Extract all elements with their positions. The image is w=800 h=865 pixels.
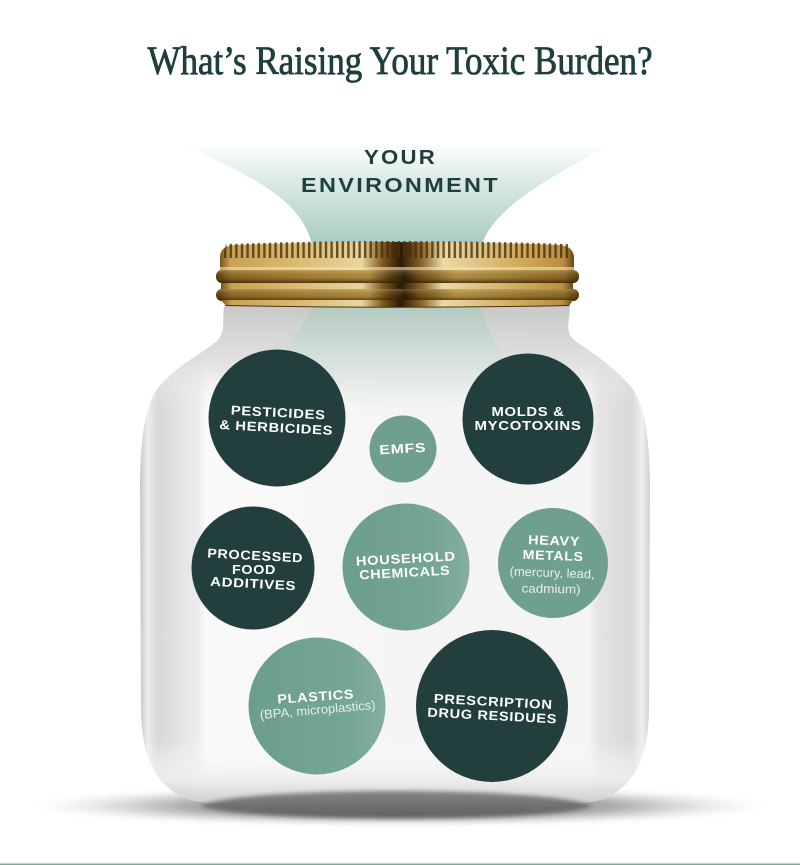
- circle: molds & mycotoxins: MOLDS &: [492, 404, 564, 419]
- funnel of environment light entering the jar: [182, 144, 612, 244]
- circle: household chemicals: [342, 504, 470, 630]
- circle: prescription drug residues: [416, 630, 568, 782]
- circle: pesticides & herbicides: & HERBICIDES: [219, 417, 334, 438]
- bottom rule: [0, 864, 800, 865]
- circle: processed food additives: ADDITIVES: [210, 574, 297, 593]
- circle: prescription drug residues: DRUG RESIDUES: [427, 705, 558, 726]
- heading: your environment: [301, 147, 500, 197]
- circle: plastics: (BPA, microplastics): [259, 698, 376, 722]
- circle: EMFs: [370, 416, 436, 482]
- circle: heavy metals: METALS: [522, 547, 584, 564]
- circle: prescription drug residues: PRESCRIPTION: [433, 691, 553, 712]
- circle: heavy metals: cadmium): [521, 581, 581, 597]
- circle: EMFs: EMFS: [379, 440, 427, 457]
- circle: pesticides & herbicides: PESTICIDES: [230, 403, 326, 422]
- circle: heavy metals: (mercury, lead,: [509, 565, 595, 581]
- floor shadow: [35, 786, 765, 826]
- circle: molds & mycotoxins: MYCOTOXINS: [474, 418, 582, 433]
- circle: heavy metals: HEAVY: [528, 532, 580, 549]
- glass jar: [140, 305, 650, 812]
- circle: processed food additives: PROCESSED: [207, 546, 304, 566]
- circle: plastics: PLASTICS: [277, 686, 355, 707]
- circle: processed food additives: [192, 506, 314, 630]
- heading: your environment: YOUR: [364, 147, 437, 169]
- circle: household chemicals: CHEMICALS: [359, 563, 451, 582]
- gold lid: [216, 241, 579, 308]
- circle: processed food additives: FOOD: [232, 562, 276, 577]
- circle: pesticides & herbicides: [208, 350, 346, 486]
- title: What’s Raising Your Toxic Burden?: [148, 38, 652, 83]
- circle: molds & mycotoxins: [462, 354, 594, 484]
- beam inside jar: [235, 306, 535, 425]
- circle: household chemicals: HOUSEHOLD: [355, 548, 456, 569]
- circle: plastics: [248, 638, 386, 774]
- jar base shadow: [200, 791, 592, 818]
- circle: heavy metals: [498, 508, 608, 618]
- heading: your environment: ENVIRONMENT: [301, 175, 500, 197]
